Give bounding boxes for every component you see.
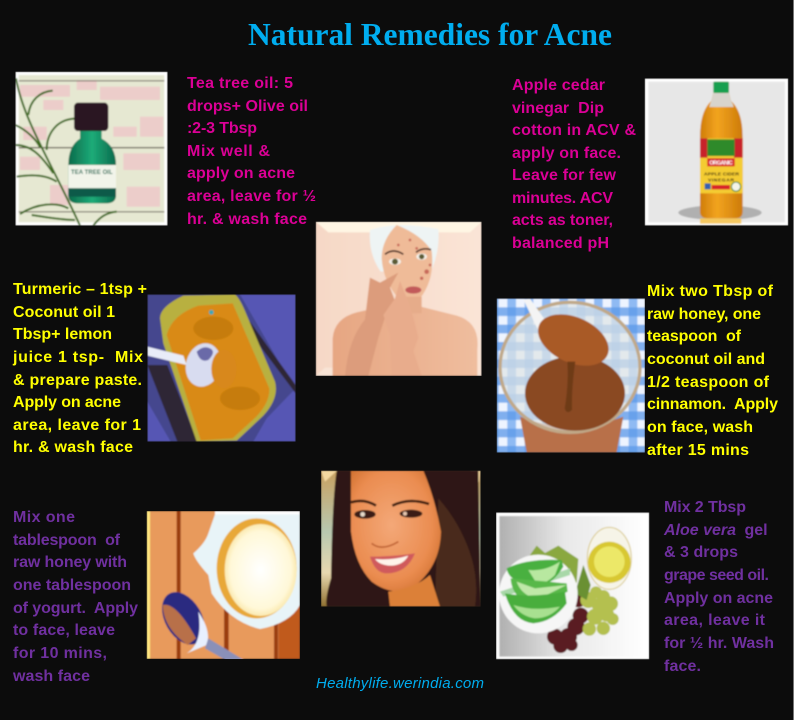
text: turmeric remedy: hr. & wash face — [13, 439, 133, 456]
photo: aloe vera and grape seed oil — [496, 512, 649, 659]
photo: tea tree oil bottle — [15, 72, 168, 226]
text: turmeric remedy: Turmeric – 1tsp + — [13, 281, 147, 298]
text: turmeric remedy: Apply on acne — [13, 394, 121, 411]
title: Natural Remedies for Acne — [248, 16, 612, 52]
text: raw honey remedy: coconut oil and — [647, 351, 765, 368]
text: tea tree oil remedy: :2-3 Tbsp — [187, 120, 257, 137]
text: honey yogurt remedy: to face, leave — [13, 622, 115, 639]
text: tea tree oil remedy: apply on acne — [187, 165, 295, 182]
text: honey yogurt remedy: raw honey with — [13, 554, 127, 571]
text: turmeric remedy: & prepare paste. — [13, 372, 142, 389]
text: aloe vera remedy: Aloe vera — [663, 522, 736, 539]
text: tea tree oil remedy — [187, 75, 316, 228]
photo: turmeric paste in dish — [147, 294, 296, 442]
text: raw honey remedy: after 15 mins — [647, 442, 749, 459]
text: turmeric remedy — [12, 281, 147, 456]
photo: apple cider vinegar bottle: VINEGAR — [708, 178, 734, 184]
photo: apple cider vinegar bottle — [645, 78, 788, 226]
text: turmeric remedy: Tbsp+ lemon — [13, 326, 112, 343]
photo: honey coconut cinnamon mix in jar — [497, 298, 645, 453]
text: aloe vera remedy: area, leave it — [664, 612, 766, 629]
text: apple cider vinegar remedy: Leave for few — [512, 167, 617, 184]
text: aloe vera remedy: gel — [740, 522, 768, 539]
text: apple cider vinegar remedy: balanced pH — [512, 235, 609, 252]
text: turmeric remedy: area, leave for 1 — [13, 417, 141, 434]
text: apple cider vinegar remedy: apply on face. — [512, 145, 621, 162]
text: aloe vera remedy: grape seed oil. — [664, 567, 769, 584]
text: honey yogurt remedy: tablespoon of — [13, 532, 121, 549]
text: apple cider vinegar remedy: acts as toner, — [512, 212, 613, 229]
text: apple cider vinegar remedy — [512, 77, 636, 252]
text: aloe vera remedy: for ½ hr. Wash — [664, 635, 774, 652]
text: raw honey remedy: raw honey, one — [647, 306, 761, 323]
text: honey yogurt remedy — [12, 509, 138, 685]
text: honey yogurt remedy: one tablespoon — [13, 577, 131, 594]
photo: apple cider vinegar bottle: APPLE CIDER — [704, 172, 739, 178]
text: raw honey remedy: 1/2 teaspoon of — [647, 374, 770, 391]
right edge strip — [793, 0, 794, 720]
text: aloe vera remedy: face. — [664, 658, 701, 675]
text: raw honey remedy: on face, wash — [647, 419, 753, 436]
text: apple cider vinegar remedy: Apple cedar — [512, 77, 605, 94]
text: tea tree oil remedy: Mix well & — [187, 143, 270, 160]
text: aloe vera remedy: Apply on acne — [664, 590, 773, 607]
photo: honey yogurt bowl with spoon — [147, 511, 300, 662]
text: aloe vera remedy — [663, 499, 774, 675]
text: raw honey remedy: Mix two Tbsp of — [647, 283, 774, 300]
photo: tea tree oil bottle: TEA TREE OIL — [71, 170, 113, 176]
text: turmeric remedy: Coconut oil 1 — [13, 304, 115, 321]
website credit: Healthylife.werindia.com — [316, 675, 484, 692]
text: turmeric remedy: juice 1 tsp- Mix — [12, 349, 143, 366]
text: honey yogurt remedy: for 10 mins, — [13, 645, 107, 662]
text: tea tree oil remedy: drops+ Olive oil — [187, 98, 308, 115]
text: apple cider vinegar remedy: vinegar Dip — [512, 100, 604, 117]
text: honey yogurt remedy: wash face — [12, 668, 90, 685]
text: raw honey remedy — [647, 283, 778, 459]
photo: apple cider vinegar bottle: ORGANIC — [709, 160, 733, 166]
text: tea tree oil remedy: hr. & wash face — [187, 211, 307, 228]
text: tea tree oil remedy: Tea tree oil: 5 — [187, 75, 293, 92]
photo: woman with acne — [316, 222, 482, 376]
text: honey yogurt remedy: of yogurt. Apply — [13, 600, 138, 617]
text: aloe vera remedy: Mix 2 Tbsp — [664, 499, 746, 516]
text: apple cider vinegar remedy: minutes. ACV — [512, 190, 613, 207]
text: aloe vera remedy: & 3 drops — [664, 544, 738, 561]
text: apple cider vinegar remedy: cotton in ACV & — [512, 122, 636, 139]
text: tea tree oil remedy: area, leave for ½ — [187, 188, 316, 205]
text: raw honey remedy: cinnamon. Apply — [647, 396, 778, 413]
photo: smiling woman with clear skin — [321, 471, 481, 607]
text: honey yogurt remedy: Mix one — [13, 509, 75, 526]
text: raw honey remedy: teaspoon of — [647, 328, 742, 345]
